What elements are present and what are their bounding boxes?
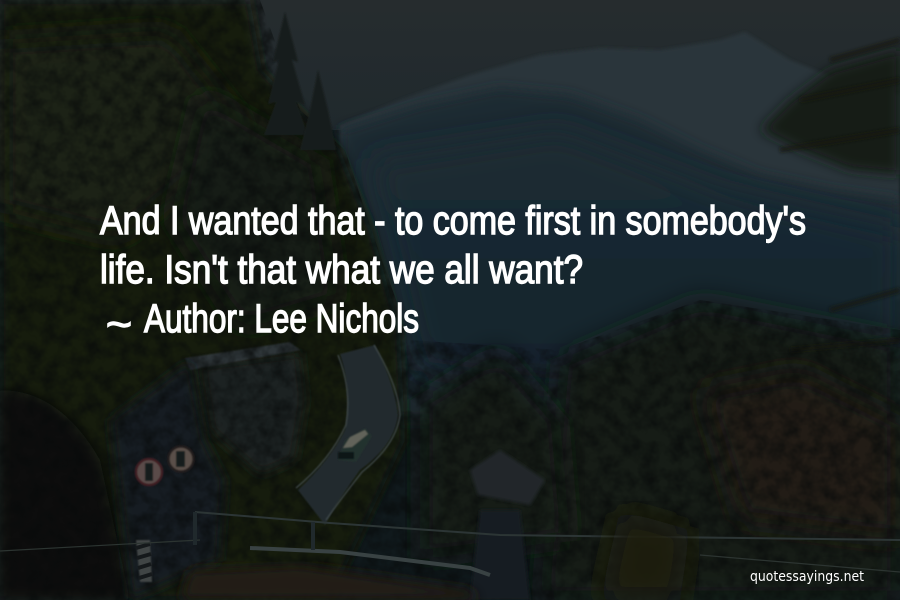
foreground dirt bbox=[180, 565, 480, 600]
rock wall bbox=[200, 352, 305, 475]
striped post bbox=[136, 540, 152, 582]
winding road bbox=[298, 345, 398, 525]
lower left dark mass bbox=[0, 390, 130, 600]
valley haze bbox=[370, 130, 900, 400]
tall fir trees bbox=[264, 12, 308, 135]
road upper wall bbox=[185, 342, 300, 370]
watermark: quotessayings.net bbox=[750, 569, 864, 585]
quote text: life. Isn't that what we all want? bbox=[100, 248, 583, 292]
quote text bbox=[100, 199, 806, 292]
quote text: And I wanted that - to come first in somebody's bbox=[100, 199, 806, 243]
author name: Author: Lee Nichols bbox=[144, 297, 419, 341]
bus bbox=[338, 428, 372, 462]
distant mountains bbox=[340, 32, 900, 300]
icon: tilde: ~ bbox=[106, 303, 132, 347]
left forest bbox=[0, 0, 405, 600]
right tunnel structure bbox=[470, 450, 545, 505]
guardrails bbox=[195, 512, 900, 540]
middle mountain ridge bbox=[340, 88, 900, 420]
author line bbox=[106, 297, 419, 347]
right forest bbox=[760, 50, 900, 175]
sky bbox=[0, 0, 900, 130]
road edge lines bbox=[296, 345, 400, 520]
left pavement bbox=[110, 360, 225, 600]
second fir tree bbox=[300, 70, 336, 150]
road signs bbox=[136, 446, 194, 485]
